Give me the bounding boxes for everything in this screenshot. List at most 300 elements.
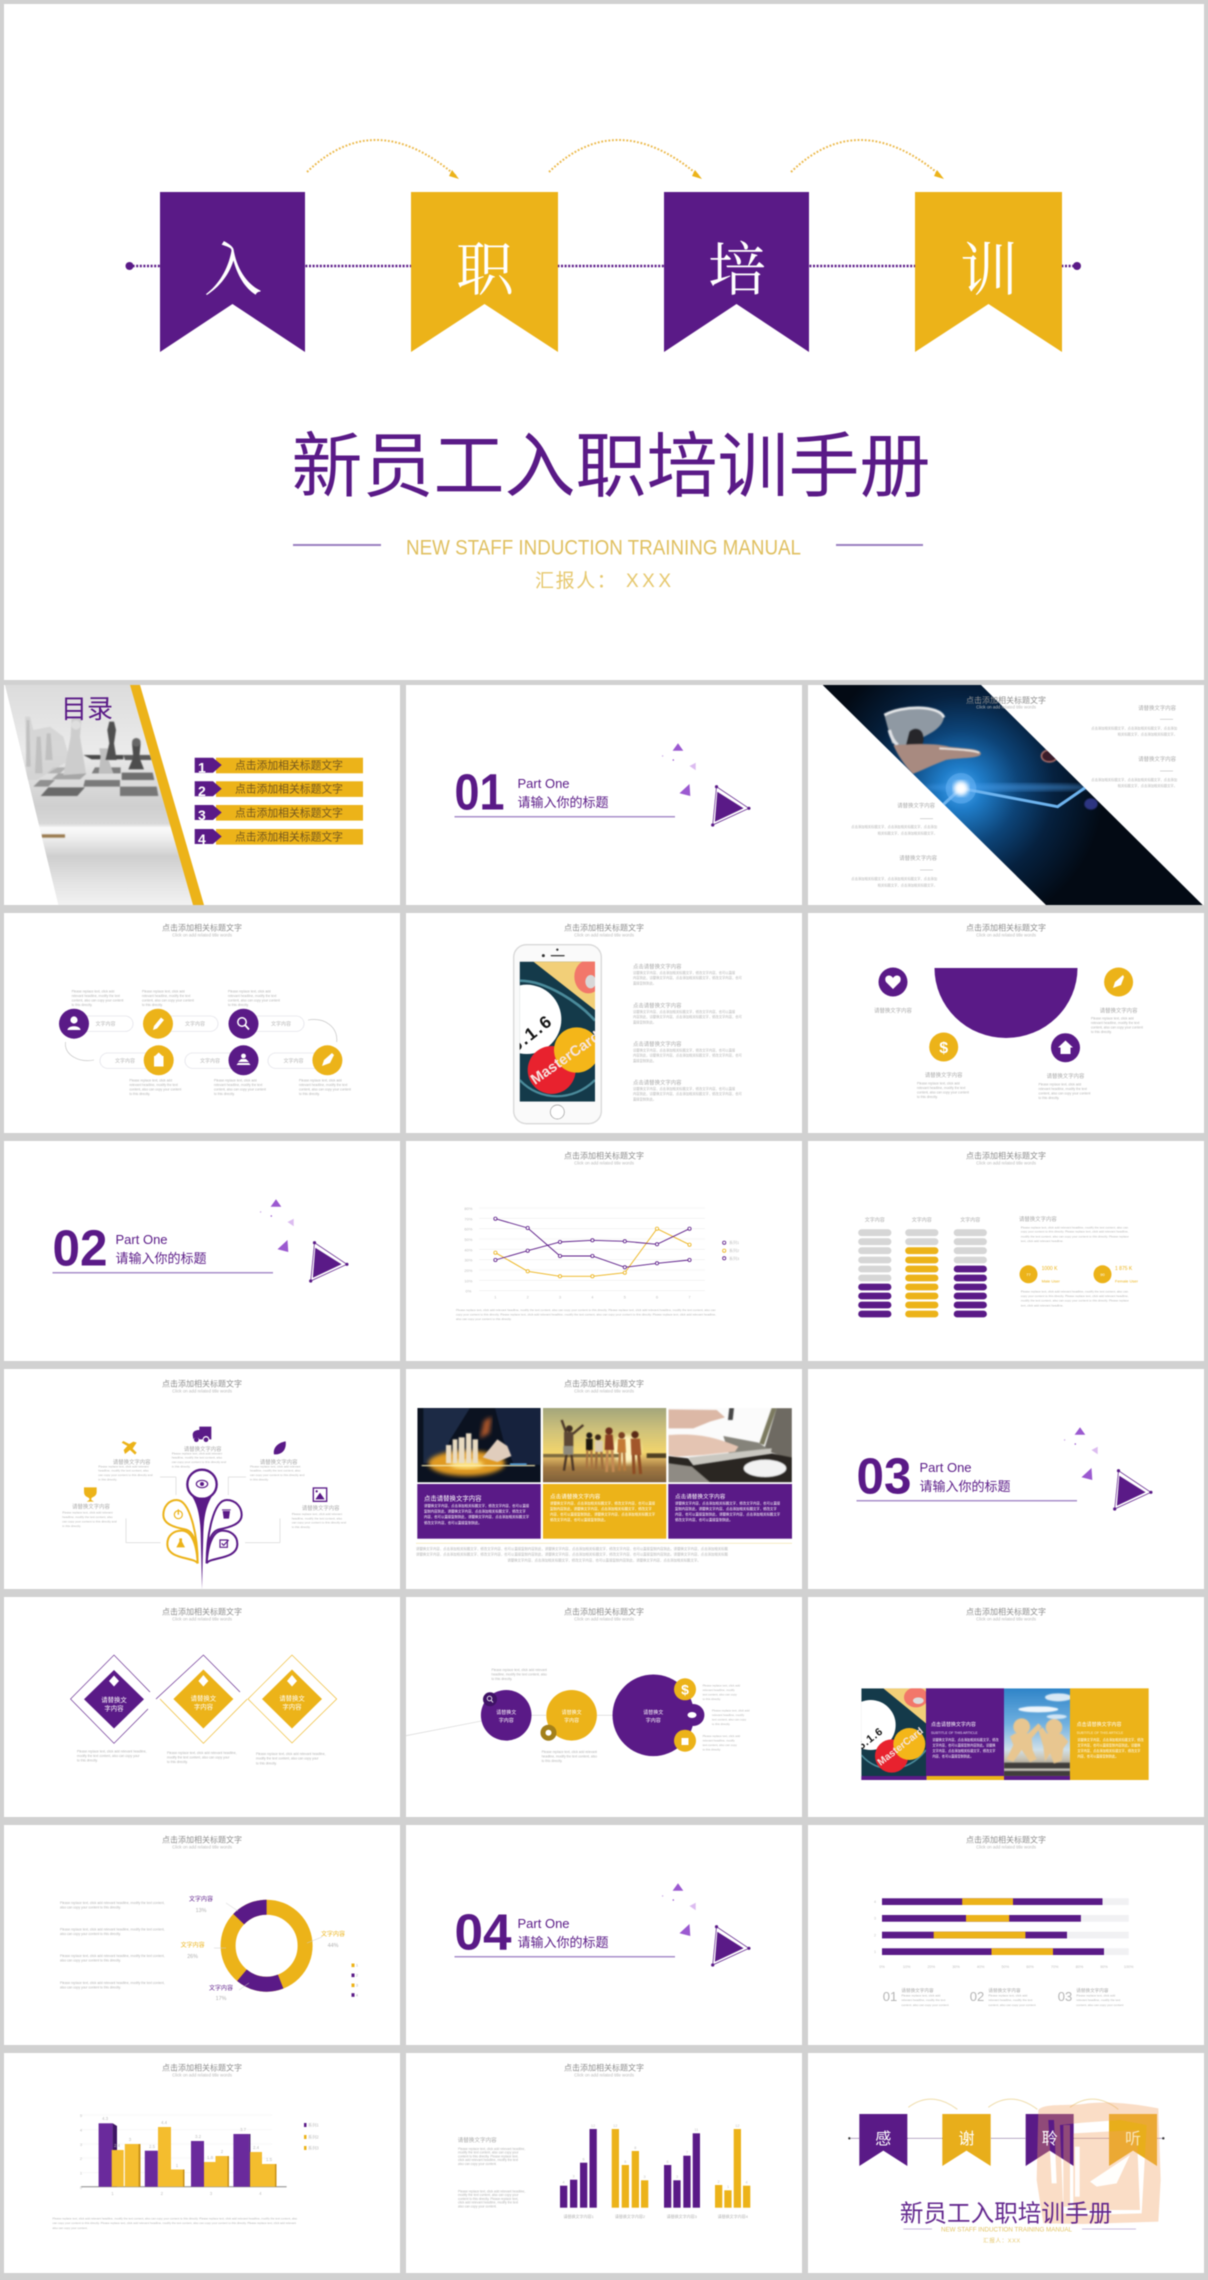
label: plane: Please replace text, click add relevant bbox=[98, 1464, 149, 1468]
panel: line chart slide bbox=[406, 1141, 802, 1361]
menu item 2: 点击添加相关标题文字 bbox=[235, 782, 343, 796]
text block: top right 2: 点击添加相关标题文字，点击添加相关标题文字，点击添加 bbox=[1091, 777, 1177, 782]
text block: top right 1: 点击添加相关标题文字，点击添加相关标题文字，点击添加 bbox=[1091, 726, 1177, 730]
slide heading: Click on add related title words bbox=[172, 2072, 233, 2078]
text block bottom: copy your content to this directly. Please replace text, click add relevant headline, bbox=[1021, 1294, 1129, 1298]
captions: right bbox=[703, 1684, 750, 1752]
column headers: 文字内容 bbox=[960, 1216, 980, 1224]
card strip: MasterCard bbox=[876, 1726, 926, 1768]
gold stripe bbox=[130, 685, 204, 905]
text block row 2 bbox=[129, 1078, 351, 1096]
card: purple 2: 复制内容到此，请替换文字内容，点击添加相关标题文字，修改文字 bbox=[675, 1506, 777, 1511]
text block row 1: content, also can copy your content bbox=[142, 998, 194, 1002]
column chart bbox=[80, 2113, 287, 2196]
pill labels: 文字内容 bbox=[271, 1021, 291, 1028]
text: dollar: to this directly. bbox=[917, 1095, 938, 1099]
icon: dollar: $ bbox=[939, 1040, 948, 1057]
line chart: 30% bbox=[464, 1258, 473, 1263]
slide heading: 点击添加相关标题文字 bbox=[162, 1606, 242, 1616]
section title: 请输入你的标题 bbox=[518, 795, 609, 810]
text block: also can copy your content. bbox=[458, 2162, 497, 2166]
subtitle rule right bbox=[836, 544, 923, 546]
chess photo bbox=[5, 684, 192, 905]
label: trophy: 请替换文字内容 bbox=[72, 1503, 110, 1511]
underline bbox=[454, 1956, 675, 1958]
text: rocket bbox=[1091, 1006, 1143, 1034]
card strip bbox=[846, 1687, 1149, 1780]
banner: 培: 培 bbox=[708, 238, 766, 303]
card: gold bbox=[543, 1484, 666, 1539]
captions: right: to this directly. bbox=[703, 1748, 721, 1752]
donut labels: 26% bbox=[187, 1954, 198, 1960]
stat 01: Please replace text, click add bbox=[901, 1994, 941, 1998]
text block row 2: Please replace text, click add bbox=[214, 1078, 257, 1082]
bar value labels: 7 bbox=[686, 2150, 688, 2154]
text list item 1: 点击请替换文字内容 bbox=[633, 962, 682, 970]
text block row 1: Please replace text, click add bbox=[72, 990, 114, 994]
bubble 2 bbox=[540, 1690, 597, 1741]
slide heading bbox=[564, 922, 644, 938]
diamond 3: 字内容 bbox=[282, 1702, 302, 1711]
icon: rocket bbox=[312, 1045, 342, 1075]
semicircle bbox=[934, 968, 1078, 1038]
caption: bottom bbox=[542, 1750, 597, 1763]
slide heading: Click on add related title words bbox=[172, 932, 233, 938]
text block top: 请替换文字内容 bbox=[1019, 1215, 1057, 1223]
column chart: 3 bbox=[80, 2142, 83, 2147]
column chart: 4 bbox=[259, 2191, 262, 2196]
section title: 请输入你的标题 bbox=[920, 1479, 1011, 1494]
bar value labels bbox=[562, 2124, 748, 2189]
stat 02 bbox=[970, 1987, 1036, 2007]
column chart: 1.5 bbox=[266, 2157, 273, 2162]
english subtitle: NEW STAFF INDUCTION TRAINING MANUAL bbox=[941, 2228, 1073, 2234]
banner labels bbox=[875, 2130, 1141, 2148]
slide heading bbox=[966, 922, 1046, 938]
label: picture: in this directly. bbox=[292, 1525, 311, 1529]
slide heading bbox=[162, 1378, 242, 1394]
text block row 2: Please replace text, click add bbox=[129, 1078, 172, 1082]
text block: top right 1: 请替换文字内容 bbox=[1138, 704, 1177, 712]
bar value labels: 4 bbox=[746, 2180, 748, 2184]
text list item 3: 直接复制到此。 bbox=[633, 1058, 656, 1063]
menu item 3: 3 bbox=[198, 807, 206, 823]
number 04: 04 bbox=[454, 1904, 512, 1960]
panel: diamonds slide bbox=[4, 1597, 400, 1817]
text block bottom: text, click add relevant headline. bbox=[1021, 1303, 1064, 1307]
bubble 1: 字内容 bbox=[499, 1717, 514, 1724]
arrow: arc 3 bbox=[791, 140, 944, 179]
menu item 1: 点击添加相关标题文字 bbox=[235, 758, 343, 772]
text block row 1: content, also can copy your content bbox=[72, 998, 124, 1002]
stat 02: relevant headline, modify the text bbox=[988, 1998, 1033, 2002]
column chart: 4.4 bbox=[161, 2120, 168, 2125]
pill labels: 文字内容 bbox=[283, 1057, 304, 1064]
text block row 2: to this directly. bbox=[299, 1092, 320, 1096]
column chart: 2 bbox=[221, 2149, 224, 2154]
panel: 3D column chart slide bbox=[4, 2053, 400, 2273]
text block row 1: Please replace text, click add bbox=[142, 990, 185, 994]
slide heading bbox=[564, 2062, 644, 2078]
slide heading: 点击添加相关标题文字 bbox=[564, 922, 644, 932]
bar group 2 bbox=[612, 2129, 648, 2208]
panel: four bar groups slide bbox=[406, 2053, 802, 2273]
stacked bar chart: 10% bbox=[903, 1965, 911, 1969]
text block top: copy your content to this directly. Please replace text, click add relevant headline, bbox=[1021, 1230, 1129, 1234]
text block: top right 2: 相关标题文字，点击添加相关标题文字。 bbox=[1118, 783, 1177, 788]
panel: section 03 bbox=[808, 1369, 1204, 1589]
captions: to this directly. bbox=[167, 1760, 188, 1764]
stacked bar chart: 4 bbox=[874, 1900, 876, 1904]
pill labels: 文字内容 bbox=[200, 1057, 220, 1064]
text block bbox=[458, 2136, 525, 2208]
label: leaf: 请替换文字内容 bbox=[260, 1458, 298, 1466]
captions bbox=[77, 1750, 326, 1766]
text block: modify the text content, also can copy your bbox=[458, 2151, 519, 2155]
slide heading: Click on add related title words bbox=[574, 1388, 635, 1394]
text list item 2: 内容到此，请替换文字内容，点击添加相关标题文字，修改文字内容，也可 bbox=[633, 1014, 742, 1019]
stat 03: 请替换文字内容 bbox=[1076, 1987, 1109, 1994]
chart legend: 系列2 bbox=[729, 1247, 740, 1253]
chart legend: 系列2 bbox=[308, 2134, 319, 2140]
panel: section 02 bbox=[4, 1141, 400, 1361]
caption: bottom: headline, modify the text content, also bbox=[542, 1754, 597, 1758]
caption: top: to this directly. bbox=[492, 1677, 512, 1681]
text list item 1: 内容到此，请替换文字内容，点击添加相关标题文字，修改文字内容，也可 bbox=[633, 975, 742, 980]
bubble 2: 请替换文 bbox=[562, 1709, 582, 1716]
pill labels bbox=[95, 1021, 304, 1064]
card text 2: 点击请替换文字内容 bbox=[1077, 1721, 1122, 1728]
bar group labels: 请替换文字内容1 bbox=[563, 2213, 594, 2219]
column chart: 2.5 bbox=[149, 2144, 156, 2149]
decorative triangles bbox=[662, 1883, 696, 1936]
line chart: 1 bbox=[494, 1294, 497, 1300]
text block: left 2: 点击添加相关标题文字，点击添加相关标题文字，点击添加 bbox=[851, 876, 937, 881]
slide heading: 点击添加相关标题文字 bbox=[564, 1606, 644, 1616]
number 01: 01 bbox=[454, 764, 504, 820]
text list item 3: 内容到此，请替换文字内容，点击添加相关标题文字，修改文字内容，也可 bbox=[633, 1053, 742, 1058]
column chart: 4 bbox=[80, 2128, 83, 2132]
panel: tree slide bbox=[4, 1369, 400, 1589]
bubble 3 bbox=[612, 1674, 704, 1756]
text block: top right 2 bbox=[1091, 755, 1177, 788]
bar value labels: 6 bbox=[624, 2160, 626, 2164]
text block row 2: Please replace text, click add bbox=[299, 1078, 342, 1082]
chart legend bbox=[304, 2122, 319, 2152]
label: truck bbox=[172, 1445, 226, 1468]
label: trophy: in this directly. bbox=[62, 1524, 81, 1528]
part label: Part One bbox=[116, 1232, 168, 1247]
label: trophy: headline, modify the text content, also bbox=[62, 1515, 113, 1519]
banner: 训: 训 bbox=[960, 238, 1018, 303]
column chart: 1 bbox=[176, 2163, 179, 2168]
text block: modify the text content, also can copy your bbox=[458, 2193, 519, 2197]
stacked bar chart: 2 bbox=[874, 1933, 876, 1937]
play triangle icon bbox=[711, 1925, 750, 1967]
pills row 2 bbox=[100, 1053, 324, 1068]
label: leaf: can copy your content to this directly and bbox=[250, 1473, 305, 1477]
captions: right: Please replace text, click add bbox=[703, 1684, 740, 1688]
slide heading: Click on add related title words bbox=[574, 932, 635, 938]
text: house: relevant headline, modify the text bbox=[1038, 1087, 1087, 1091]
label: leaf: headline, modify the text content, also bbox=[250, 1469, 301, 1473]
column chart: 2.4 bbox=[114, 2143, 121, 2148]
text block: top right 2: 请替换文字内容 bbox=[1138, 755, 1177, 763]
banner: 入: 入 bbox=[204, 238, 262, 303]
diamond 1: 字内容 bbox=[104, 1704, 124, 1712]
label: plane: can copy your content to this directly and bbox=[98, 1473, 153, 1477]
bar group labels: 请替换文字内容2 bbox=[615, 2213, 646, 2219]
slide heading: 点击添加相关标题文字 bbox=[162, 1378, 242, 1388]
captions: modify the text content, also can copy your bbox=[256, 1756, 319, 1760]
slide heading: 点击添加相关标题文字 bbox=[162, 2062, 242, 2072]
card text 2 bbox=[1077, 1721, 1144, 1759]
slide heading: Click on add related title words bbox=[574, 2072, 635, 2078]
diamond 3 bbox=[262, 1670, 322, 1728]
text list item 4: 直接复制到此。 bbox=[633, 1096, 656, 1102]
text: rocket: content, also can copy your content bbox=[1091, 1026, 1143, 1030]
phone mockup: 5.1.6 bbox=[506, 1010, 557, 1056]
menu item 2: 2 bbox=[198, 783, 206, 799]
banner: 职 bbox=[411, 192, 558, 352]
text block: click add relevant headline, modify the text bbox=[458, 2158, 518, 2162]
slide heading: 点击添加相关标题文字 bbox=[564, 1150, 644, 1160]
donut legend: 2 bbox=[356, 1974, 358, 1978]
column chart: 2 bbox=[161, 2191, 164, 2196]
caption bbox=[52, 2216, 298, 2230]
text block row 1: content, also can copy your content bbox=[228, 998, 280, 1002]
slide heading: Click on add related title words bbox=[172, 1616, 233, 1622]
text block: left 1: 点击添加相关标题文字，点击添加相关标题文字，点击添加 bbox=[851, 824, 937, 829]
stacked bar chart: 20% bbox=[927, 1965, 936, 1969]
card text 1: 内容，也可以直接复制到此。 bbox=[932, 1754, 973, 1759]
bar value labels: 3 bbox=[644, 2175, 646, 2179]
label: leaf: in this directly. bbox=[250, 1478, 269, 1482]
label: picture: can copy your content to this directly and bbox=[292, 1521, 346, 1525]
donut labels: 17% bbox=[216, 1996, 227, 2002]
column chart: 2 bbox=[80, 2156, 83, 2161]
icon: rocket bbox=[1104, 968, 1133, 996]
left captions: also can copy your content to this directly. bbox=[60, 1906, 121, 1910]
stat 03: 03 bbox=[1058, 1989, 1072, 2004]
label: trophy: can copy your content to this directly and bbox=[62, 1520, 117, 1524]
slide heading bbox=[966, 1834, 1046, 1850]
stat: male user: 1000 K bbox=[1042, 1266, 1058, 1272]
diamond 2 bbox=[173, 1670, 233, 1728]
outline diamonds bbox=[70, 1655, 337, 1743]
panel: stacked bar slide bbox=[808, 1825, 1204, 2045]
panel: donut chart slide bbox=[4, 1825, 400, 2045]
photo: glowing city bbox=[417, 1408, 541, 1482]
left captions: Please replace text, click add relevant headline, modify the text content, bbox=[60, 1954, 165, 1958]
panel: section 01 bbox=[406, 685, 802, 905]
slide heading bbox=[162, 1834, 242, 1850]
card text 2: 请替换文字内容，点击添加相关标题文字，修改 bbox=[1077, 1737, 1144, 1742]
bubble 3: 请替换文 bbox=[643, 1709, 663, 1716]
panel: phone slide bbox=[406, 913, 802, 1133]
menu item 3 bbox=[195, 805, 363, 823]
donut legend: 1 bbox=[356, 1964, 358, 1968]
pills row 1 bbox=[74, 1016, 304, 1031]
footer text: 请替换文字内容，点击添加相关标题文字，修改文字内容，也可以直接复制内容到此，请替换文字内容，点击添加相关标题文字。 bbox=[507, 1557, 701, 1562]
text: house: to this directly. bbox=[1038, 1096, 1059, 1100]
section title: 请输入你的标题 bbox=[116, 1251, 207, 1266]
card text 1: 文字内容，点击添加相关标题文字，修改文字 bbox=[932, 1748, 995, 1753]
card: gold: 复制内容到此，请替换文字内容，点击添加相关标题文字，修改文字 bbox=[550, 1506, 652, 1511]
bar value labels: 2 bbox=[718, 2180, 720, 2184]
card text 1: 文字内容，也可以直接复制内容到此。请替换 bbox=[932, 1742, 996, 1747]
photo: beach sunset bbox=[543, 1408, 666, 1482]
bar value labels: 8 bbox=[634, 2146, 636, 2150]
text block: Please replace text, click add relevant headline, bbox=[458, 2190, 525, 2194]
label: plane: in this directly. bbox=[98, 1478, 117, 1482]
column chart: 1 bbox=[80, 2170, 83, 2176]
line chart: 50% bbox=[464, 1237, 473, 1242]
card: purple 1: 请替换文字内容，点击添加相关标题文字，修改文字内容，也可以直接 bbox=[424, 1503, 530, 1508]
text block: click add relevant headline, modify the text bbox=[458, 2201, 518, 2205]
chart legend bbox=[723, 1239, 740, 1261]
bar group labels: 请替换文字内容4 bbox=[718, 2213, 749, 2219]
stat 03: relevant headline, modify the text bbox=[1076, 1998, 1120, 2002]
text block: left 2: 相关标题文字，点击添加相关标题文字。 bbox=[878, 882, 937, 888]
bar value labels: 3 bbox=[572, 2174, 575, 2178]
bar value labels: 6 bbox=[582, 2158, 585, 2162]
slide heading: Click on add related title words bbox=[976, 1844, 1037, 1850]
icon: briefcase bbox=[144, 1045, 174, 1075]
left captions: Please replace text, click add relevant headline, modify the text content, bbox=[60, 1901, 165, 1905]
panel: semicircle slide bbox=[808, 913, 1204, 1133]
column chart: 1 bbox=[111, 2191, 114, 2196]
card: gold: 修改文字内容，也可以直接复制到此。 bbox=[550, 1517, 608, 1522]
banner labels: 谢 bbox=[958, 2130, 975, 2148]
captions: right: text content, also can copy bbox=[703, 1692, 737, 1696]
card text 1: 点击请替换文字内容 bbox=[931, 1721, 976, 1728]
caption: Please replace text, click add relevant headline, modify the text content, also can copy your content to this directly. Please replace text, click add relevant headline, modify the text content, also can bbox=[456, 1308, 716, 1312]
label: leaf: Please replace text, click add relevant bbox=[250, 1464, 301, 1468]
text: house: 请替换文字内容 bbox=[1047, 1072, 1085, 1080]
card: purple 2 bbox=[668, 1484, 792, 1539]
column chart: 4.3 bbox=[102, 2116, 109, 2121]
captions: modify the text content, also can copy your bbox=[77, 1754, 140, 1758]
caption: can copy your content to this directly. Please replace text, click add relevant headline, modify the text content, also can copy your content to this directly. Please replace text, click add relevant bbox=[52, 2221, 296, 2225]
label: trophy: Please replace text, click add relevant bbox=[62, 1510, 113, 1514]
bubble 3: 字内容 bbox=[646, 1717, 661, 1724]
number 03: 03 bbox=[856, 1448, 912, 1504]
label: plane: headline, modify the text content, also bbox=[98, 1469, 149, 1473]
stat 03: Please replace text, click add bbox=[1076, 1994, 1115, 1998]
text block top: modify the text content, also can copy your content to this directly. Please replace bbox=[1021, 1234, 1129, 1238]
line chart: 6 bbox=[656, 1294, 659, 1300]
stacked bar chart: 100% bbox=[1124, 1965, 1134, 1969]
text block row 2: to this directly. bbox=[214, 1092, 235, 1096]
card: purple 2: 内容，也可以直接复制到此，请替换文字内容，点击添加相关标题文字 bbox=[675, 1511, 781, 1516]
slide heading: Click on add related title words bbox=[574, 1616, 635, 1622]
text: dollar bbox=[917, 1071, 969, 1099]
text list item 2: 直接复制到此。 bbox=[633, 1020, 656, 1024]
text: rocket: relevant headline, modify the text bbox=[1091, 1021, 1139, 1025]
stat 03: content, also can copy your content bbox=[1076, 2003, 1124, 2007]
captions: modify the text content, also can copy your bbox=[167, 1756, 230, 1760]
text block row 1: to this directly. bbox=[228, 1003, 249, 1007]
decorative triangles bbox=[1064, 1427, 1098, 1480]
text list item 2: 请替换文字内容，点击添加相关标题文字，修改文字内容，也可以直接 bbox=[633, 1009, 736, 1014]
slide heading: 点击添加相关标题文字 bbox=[564, 1378, 644, 1388]
arrow: arc 1 bbox=[307, 140, 459, 179]
panel: thanks slide bbox=[808, 2053, 1204, 2273]
text: dollar: relevant headline, modify the text bbox=[917, 1086, 965, 1090]
label: picture: Please replace text, click add relevant bbox=[292, 1512, 342, 1516]
captions: right: relevant headline, modify bbox=[712, 1713, 745, 1717]
stacked bar chart: 40% bbox=[977, 1965, 985, 1969]
captions: right: Please replace text, click add bbox=[712, 1708, 750, 1712]
column headers bbox=[865, 1216, 980, 1224]
donut labels: 文字内容 bbox=[321, 1930, 345, 1938]
text list item 3: 点击请替换文字内容 bbox=[633, 1040, 682, 1048]
card: purple 2: 请替换文字内容，点击添加相关标题文字，修改文字内容，也可以直接 bbox=[675, 1500, 781, 1506]
donut labels: 文字内容 bbox=[181, 1941, 205, 1949]
captions: to this directly. bbox=[256, 1762, 277, 1766]
stacked bar chart: 1 bbox=[874, 1950, 876, 1954]
slide heading bbox=[564, 1150, 644, 1166]
card text 2: 文字内容，点击添加相关标题文字，修改文字 bbox=[1077, 1748, 1140, 1753]
line chart: 4 bbox=[591, 1294, 594, 1300]
bar group labels: 请替换文字内容3 bbox=[667, 2213, 698, 2219]
stat: male user bbox=[1020, 1265, 1060, 1284]
pill column 1 bbox=[858, 1229, 891, 1317]
text: dollar: Please replace text, click add bbox=[917, 1082, 960, 1086]
text block: left 2: 请替换文字内容 bbox=[899, 854, 938, 862]
banner labels: 聆 bbox=[1042, 2130, 1058, 2148]
stacked bar chart: 60% bbox=[1026, 1965, 1034, 1969]
caption: top bbox=[492, 1668, 547, 1681]
panel: three photos slide bbox=[406, 1369, 802, 1589]
menu item 4: 点击添加相关标题文字 bbox=[235, 829, 343, 843]
card: purple 1: 点击请替换文字内容 bbox=[424, 1494, 482, 1502]
column headers: 文字内容 bbox=[865, 1216, 885, 1224]
presenter: 汇报人： bbox=[535, 571, 617, 592]
captions: Please replace text, click add relevant headline, bbox=[167, 1751, 237, 1755]
text block row 1: relevant headline, modify the text bbox=[142, 994, 190, 998]
part label: Part One bbox=[920, 1460, 972, 1475]
label: plane bbox=[98, 1458, 153, 1482]
banner: 入 bbox=[160, 192, 305, 352]
banner labels: 听 bbox=[1125, 2130, 1141, 2148]
banner: 职: 职 bbox=[456, 238, 516, 303]
text block: content to this directly. Please replace text, bbox=[458, 2154, 518, 2158]
panel: section 04 bbox=[406, 1825, 802, 2045]
slide heading bbox=[966, 1606, 1046, 1622]
menu item 1 bbox=[195, 758, 363, 776]
label: leaf bbox=[250, 1458, 305, 1482]
caption: bottom: to this directly. bbox=[542, 1759, 563, 1763]
text block: left 2 bbox=[851, 854, 938, 888]
banner: 训 bbox=[915, 192, 1062, 352]
left captions bbox=[60, 1901, 165, 1990]
menu item 3: 点击添加相关标题文字 bbox=[235, 805, 343, 819]
column headers: 文字内容 bbox=[912, 1216, 932, 1224]
text list item 4: 点击请替换文字内容 bbox=[633, 1078, 682, 1086]
bubble 3: $ bbox=[681, 1682, 689, 1698]
slide heading: Click on add related title words bbox=[574, 1160, 635, 1166]
diamond 1: 请替换文 bbox=[101, 1695, 127, 1704]
icon: dollar bbox=[929, 1032, 958, 1062]
bar value labels: 4 bbox=[562, 2180, 565, 2184]
heading: 目录: 目录 bbox=[61, 694, 113, 724]
bar group 4 bbox=[715, 2129, 750, 2208]
panel: process flow slide bbox=[4, 913, 400, 1133]
title: 新员工入职培训手册 bbox=[291, 428, 931, 507]
chart legend: 系列1 bbox=[308, 2122, 319, 2128]
